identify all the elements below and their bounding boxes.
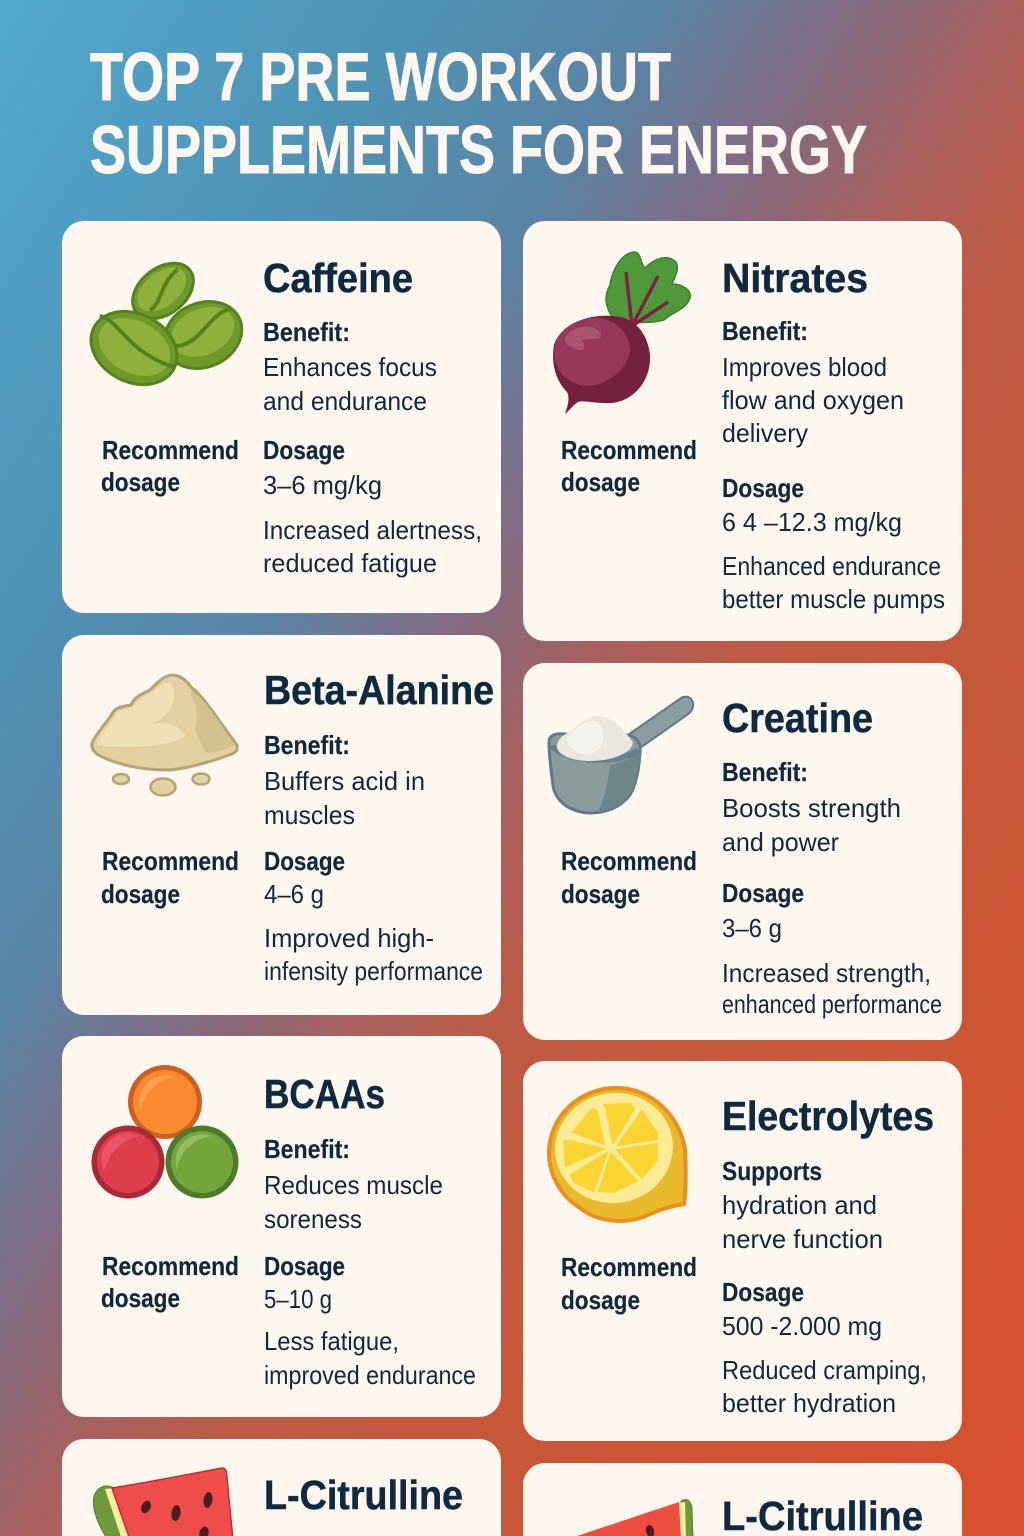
heading: electrolytes: Electrolytes — [722, 1093, 934, 1139]
text block: electrolytes details: 500 -2.000 mg — [722, 1311, 882, 1341]
text block: electrolytes details: Reduced cramping, — [722, 1355, 927, 1385]
text block: electrolytes details: better hydration — [722, 1388, 896, 1418]
text block: nitrates details: better muscle pumps — [722, 584, 945, 614]
text block: nitrates details: delivery — [722, 418, 808, 448]
panel: beta-alanine — [62, 635, 501, 1015]
icon: scoop of powder — [549, 697, 693, 813]
text block: beta-alanine details: muscles — [264, 800, 355, 830]
panel: electrolytes — [523, 1061, 962, 1441]
heading: nitrates: Nitrates — [722, 255, 868, 301]
text block: electrolytes details — [722, 1156, 927, 1418]
text block: caffeine details — [263, 317, 482, 578]
text block: beta-alanine details: infensity performance — [264, 956, 483, 986]
label: recommend dosage: Recommend — [561, 846, 697, 876]
text block: beta-alanine details: Buffers acid in — [264, 766, 425, 796]
text block: beta-alanine details: Benefit: — [264, 730, 350, 760]
icon: lemon — [546, 1084, 686, 1221]
text block: nitrates details — [722, 316, 945, 614]
text block: nitrates details: Improves blood — [722, 352, 887, 382]
text block: creatine details: and power — [722, 827, 839, 857]
text block: creatine details: Increased strength, — [722, 958, 931, 988]
text block: bcaas details: Benefit: — [264, 1134, 350, 1164]
icon: watermelon slice — [565, 1500, 693, 1536]
text block: beta-alanine details: Dosage — [264, 846, 345, 876]
title: TOP 7 PRE WORKOUT — [90, 39, 671, 115]
title — [90, 39, 867, 188]
text block: bcaas details: soreness — [264, 1204, 362, 1234]
icon: three capsules — [92, 1065, 238, 1198]
text block: beta-alanine details: Improved high- — [264, 923, 434, 953]
label: recommend dosage: Recommend — [102, 1251, 239, 1281]
label: recommend dosage — [101, 1251, 239, 1313]
label: recommend dosage: dosage — [101, 1283, 180, 1313]
text block: nitrates details: Enhanced endurance — [722, 551, 941, 581]
text block: creatine details — [722, 757, 942, 1019]
text block: caffeine details: Enhances focus — [263, 352, 437, 382]
panel: l-citrulline left — [62, 1439, 501, 1536]
label: recommend dosage — [561, 846, 697, 909]
text block: creatine details: Boosts strength — [722, 793, 901, 823]
heading: l-citrulline left: L-Citrulline — [264, 1472, 463, 1518]
label: recommend dosage — [101, 435, 239, 497]
text block: beta-alanine details: 4–6 g — [264, 879, 324, 909]
text block: bcaas details: 5–10 g — [264, 1284, 332, 1314]
text block: creatine details: Benefit: — [722, 757, 808, 787]
label: recommend dosage: dosage — [561, 1285, 640, 1315]
icon: beetroot — [553, 252, 690, 414]
heading: creatine: Creatine — [722, 695, 873, 741]
text block: caffeine details: and endurance — [263, 386, 427, 416]
text block: electrolytes details: Dosage — [722, 1277, 804, 1307]
icon: coffee beans — [78, 252, 253, 399]
label: recommend dosage: dosage — [561, 879, 640, 909]
text block: electrolytes details: nerve function — [722, 1224, 883, 1254]
panel: caffeine — [62, 221, 501, 613]
text block: nitrates details: Dosage — [722, 473, 804, 503]
label: recommend dosage: Recommend — [561, 1252, 697, 1282]
text block: caffeine details: Increased alertness, — [263, 515, 482, 545]
label: recommend dosage — [561, 435, 697, 497]
heading: beta-alanine: Beta-Alanine — [264, 667, 494, 713]
text block: beta-alanine details — [264, 730, 483, 986]
text block: bcaas details: Less fatigue, — [264, 1326, 399, 1356]
panel: l-citrulline right — [523, 1463, 962, 1536]
text block: bcaas details: Dosage — [264, 1251, 345, 1281]
text block: caffeine details: 3–6 mg/kg — [263, 470, 382, 500]
label: recommend dosage — [101, 846, 239, 909]
label: recommend dosage: dosage — [101, 879, 180, 909]
label: recommend dosage: Recommend — [102, 846, 239, 876]
panel: bcaas — [62, 1036, 501, 1417]
label: recommend dosage: dosage — [561, 467, 640, 497]
text block: bcaas details — [264, 1134, 476, 1390]
text block: caffeine details: Dosage — [263, 435, 345, 465]
text block: creatine details: 3–6 g — [722, 913, 782, 943]
heading: bcaas: BCAAs — [264, 1071, 385, 1117]
text block: electrolytes details: hydration and — [722, 1190, 877, 1220]
icon: powder pile — [92, 675, 237, 796]
panel: creatine — [523, 663, 962, 1040]
text block: creatine details: enhanced performance — [722, 989, 942, 1019]
text block: nitrates details: flow and oxygen — [722, 385, 904, 415]
text block: creatine details: Dosage — [722, 878, 804, 908]
text block: caffeine details: Benefit: — [263, 317, 350, 347]
text block: bcaas details: Reduces muscle — [264, 1170, 443, 1200]
label: recommend dosage: dosage — [101, 467, 180, 497]
label: recommend dosage: Recommend — [561, 435, 697, 465]
label: recommend dosage — [561, 1252, 697, 1315]
text block: nitrates details: 6 4 –12.3 mg/kg — [722, 507, 902, 537]
icon: watermelon slice — [93, 1468, 233, 1536]
heading: caffeine: Caffeine — [263, 255, 413, 301]
panel: nitrates — [523, 221, 962, 641]
text block: electrolytes details: Supports — [722, 1156, 822, 1186]
text block: bcaas details: improved endurance — [264, 1360, 476, 1390]
text block: caffeine details: reduced fatigue — [263, 548, 437, 578]
text block: nitrates details: Benefit: — [722, 316, 808, 346]
label: recommend dosage: Recommend — [102, 435, 239, 465]
